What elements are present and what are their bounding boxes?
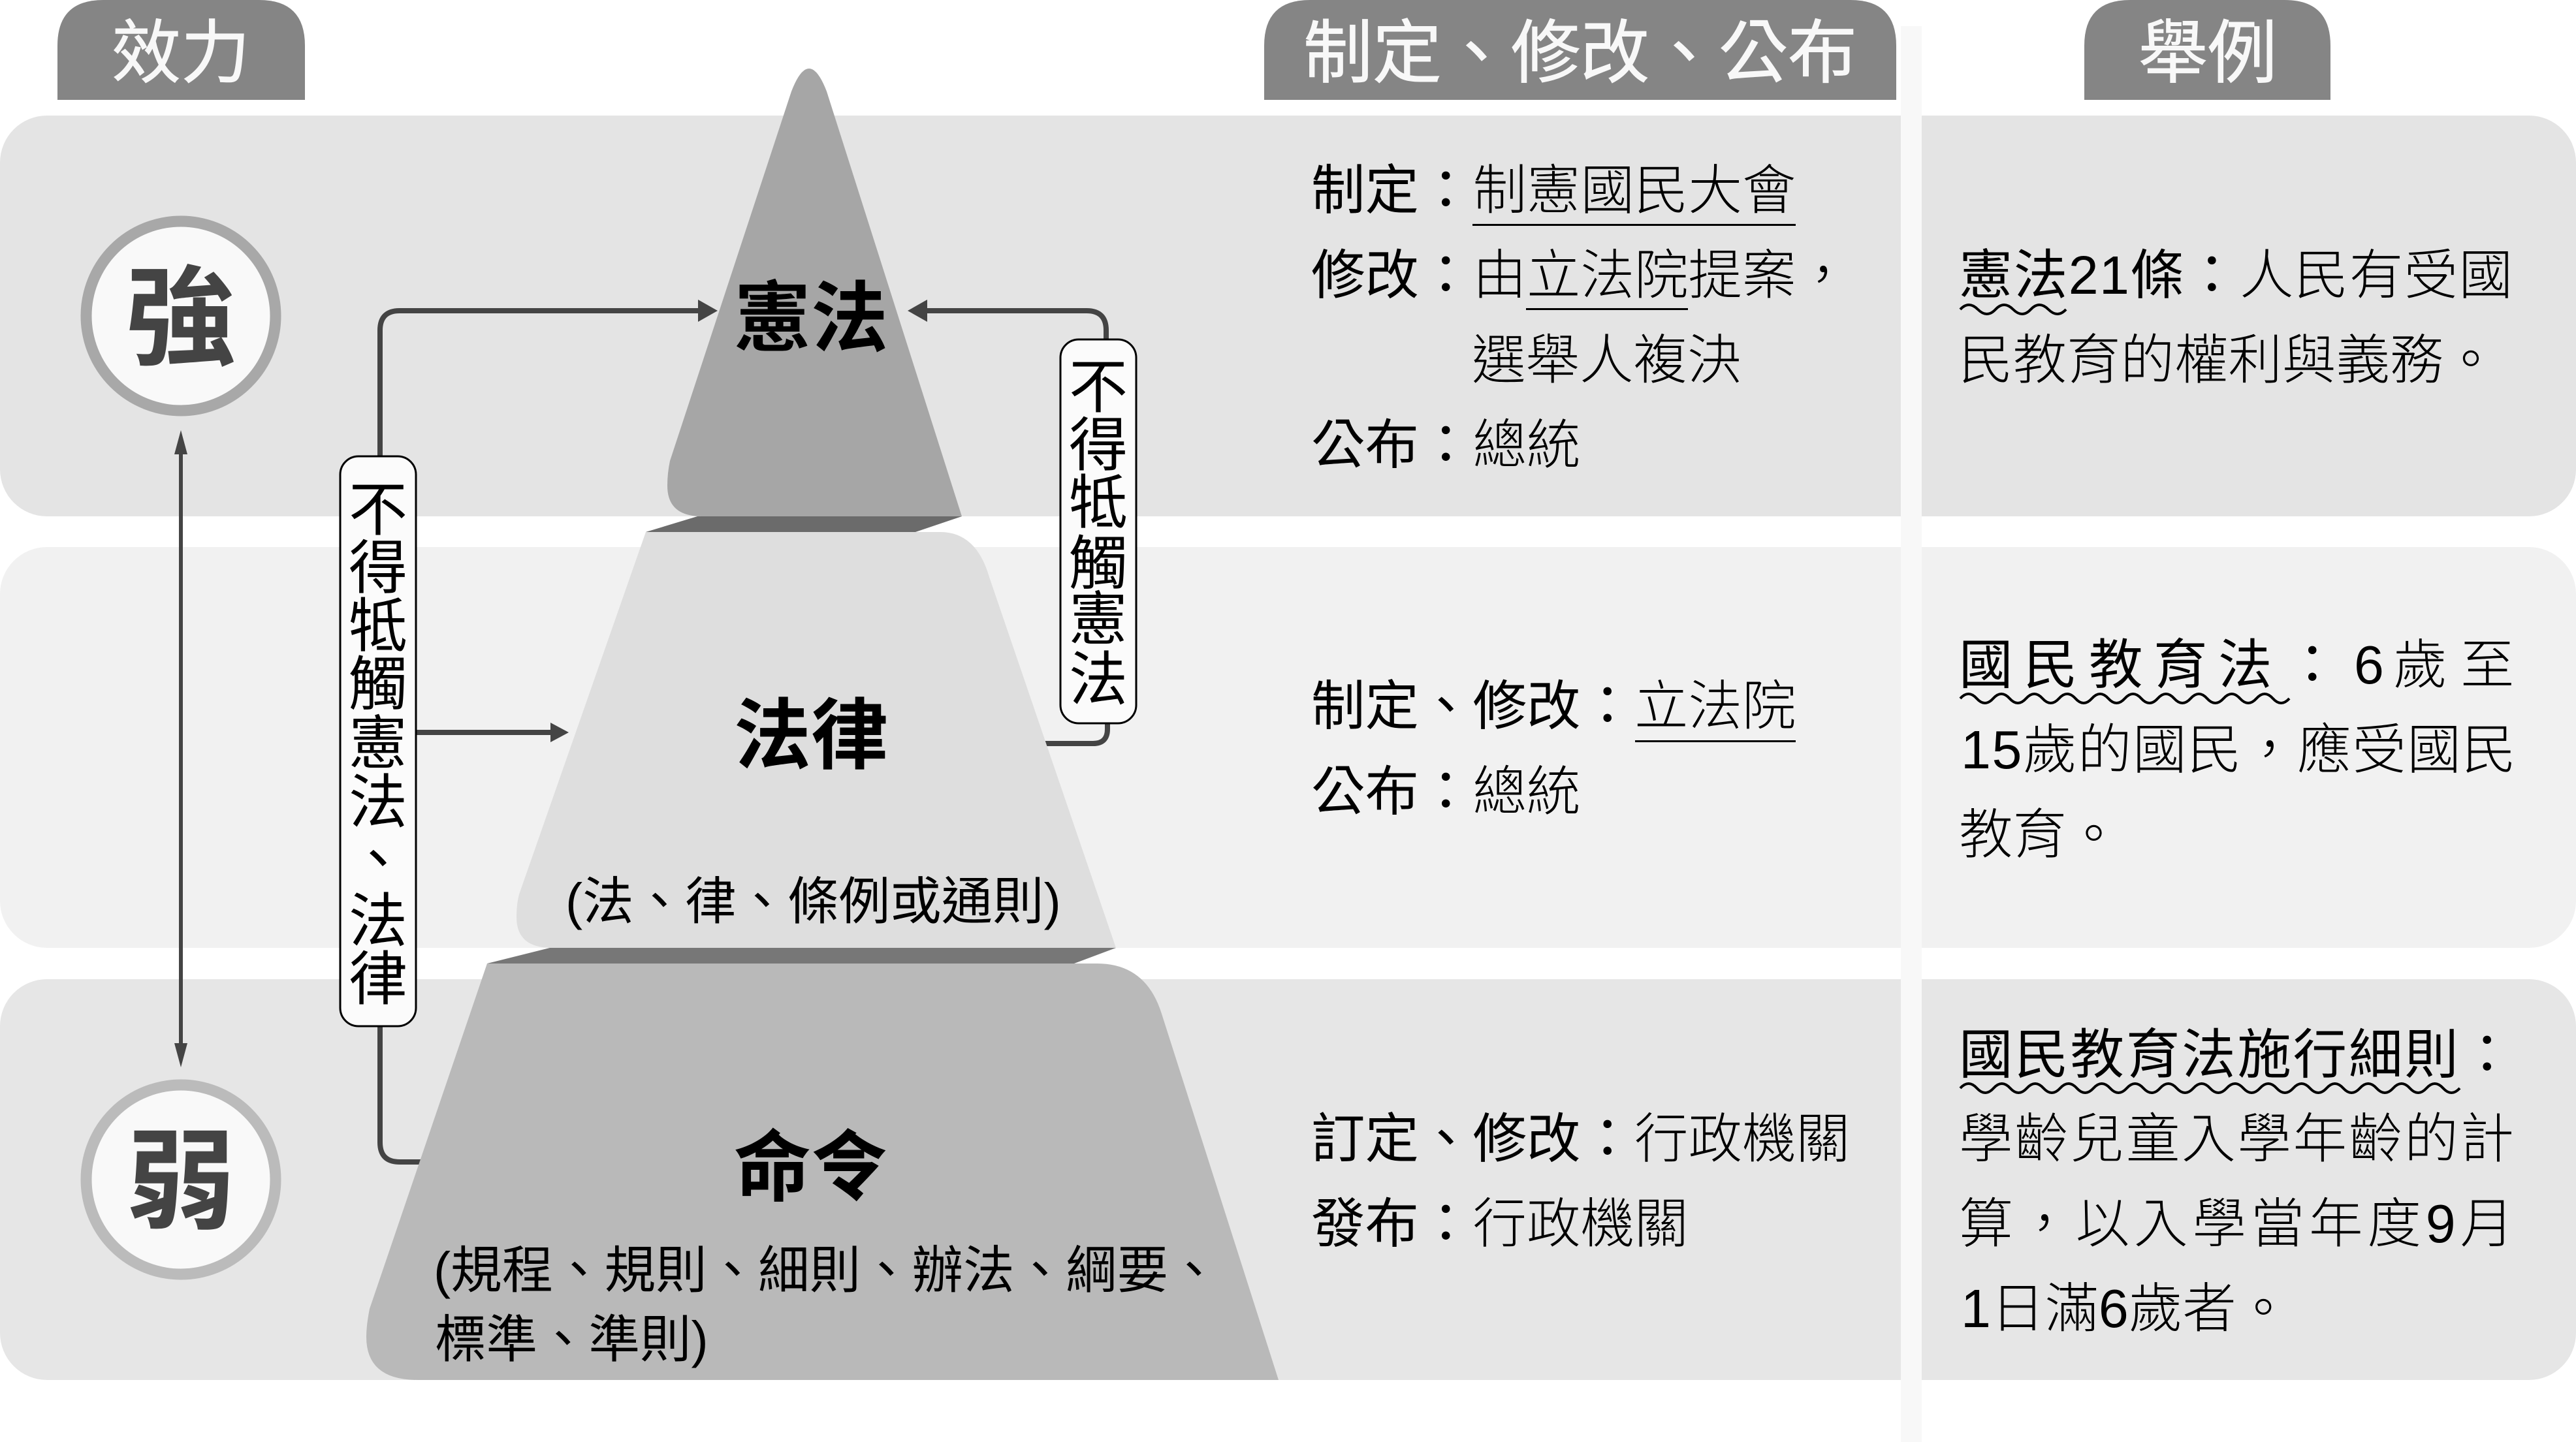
pyramid tier: orders — [366, 964, 1279, 1380]
label box: right: 得 — [1069, 413, 1128, 478]
text: constitution procedure: 制定：制憲國民大會 — [1311, 161, 1796, 221]
example: national education act: 教育。 — [1959, 805, 2121, 865]
example: national education act — [1959, 635, 2516, 865]
example: national education act: 15歲的國民，應受國民 — [1961, 720, 2516, 780]
pyramid shelf upper — [646, 516, 962, 532]
panel: band orders — [0, 979, 2576, 1380]
text: statute procedure: 公布：總統 — [1311, 762, 1580, 822]
header: effect — [57, 0, 305, 100]
pyramid tier: constitution — [667, 69, 962, 516]
example: enforcement rules — [1959, 1025, 2514, 1339]
text: constitution procedure — [1311, 161, 1850, 475]
text: constitution procedure: 修改：由立法院提案， — [1311, 245, 1850, 306]
label box: left: 法 — [349, 889, 407, 954]
label box: right — [1060, 339, 1136, 723]
label box: right: 牴 — [1069, 471, 1128, 536]
label box: right: 法 — [1069, 648, 1128, 713]
label box: left: 憲 — [349, 712, 407, 777]
example: constitution article 21: 憲法21條：人民有受國 — [1959, 245, 2513, 306]
header: examples: 舉例 — [2139, 15, 2277, 92]
example: national education act: 6歲至 — [2354, 635, 2514, 695]
panel: band constitution — [0, 116, 2576, 516]
label box: left: 牴 — [349, 594, 407, 659]
circle: strong: 強 — [126, 257, 236, 380]
label box: left: 、 — [349, 828, 407, 893]
label box: left: 得 — [349, 536, 407, 601]
arrow: left box to statutes — [415, 723, 569, 742]
column divider — [1901, 26, 1922, 1442]
circle: weak — [86, 1085, 276, 1274]
label box: left: 律 — [349, 947, 407, 1012]
pyramid tier: orders: 命令 — [734, 1125, 888, 1212]
pyramid tier: statutes — [517, 532, 1116, 948]
example: enforcement rules: 國民教育法施行細則： — [1959, 1025, 2514, 1085]
arrow: left box to orders — [380, 1025, 431, 1162]
arrow: statutes to right box — [1038, 722, 1107, 744]
label box: right: 觸 — [1069, 531, 1128, 597]
arrow: strength scale — [174, 430, 187, 1067]
panel: band statutes — [0, 547, 2576, 948]
label box: left: 觸 — [349, 652, 407, 717]
example: enforcement rules: 1日滿6歲者。 — [1961, 1279, 2290, 1339]
label box: left — [340, 456, 416, 1026]
text: constitution procedure: 公布：總統 — [1311, 415, 1580, 475]
pyramid shelf lower — [487, 948, 1116, 964]
header: enact amend promulgate — [1264, 0, 1896, 100]
header: effect: 效力 — [112, 15, 250, 92]
example: constitution article 21 — [1959, 245, 2513, 390]
pyramid tier: statutes: 法律 — [734, 693, 888, 779]
text: order procedure: 發布：行政機關 — [1311, 1194, 1689, 1254]
text: order procedure — [1311, 1109, 1850, 1254]
pyramid tier: statutes: (法、律、條例或通則) — [565, 873, 1061, 930]
example: enforcement rules: 學齡兒童入學年齡的計 — [1959, 1109, 2514, 1169]
header: examples — [2084, 0, 2330, 100]
label box: right: 不 — [1069, 355, 1128, 420]
pyramid tier: orders: (規程、規則、細則、辦法、綱要、 — [434, 1242, 1220, 1299]
example: enforcement rules: 算，以入學當年度9月 — [1959, 1194, 2514, 1254]
example: national education act: 國民教育法： — [1959, 635, 2339, 695]
example: constitution article 21: 民教育的權利與義務。 — [1959, 330, 2498, 390]
header: enact amend promulgate: 制定、修改、公布 — [1303, 15, 1857, 92]
label box: left: 法 — [349, 770, 407, 836]
circle: weak: 弱 — [126, 1121, 236, 1244]
label box: right: 憲 — [1069, 588, 1128, 653]
text: order procedure: 訂定、修改：行政機關 — [1311, 1109, 1850, 1169]
text: constitution procedure: 選舉人複決 — [1472, 330, 1741, 390]
arrow: left box to constitution — [380, 300, 718, 457]
text: statute procedure — [1311, 676, 1796, 822]
arrow: right box to constitution — [908, 300, 1106, 341]
text: statute procedure: 制定、修改：立法院 — [1311, 676, 1796, 736]
pyramid tier: orders: 標準、準則) — [435, 1311, 708, 1368]
circle: strong — [86, 221, 276, 411]
label box: left: 不 — [349, 478, 407, 543]
pyramid tier: constitution: 憲法 — [734, 276, 888, 362]
